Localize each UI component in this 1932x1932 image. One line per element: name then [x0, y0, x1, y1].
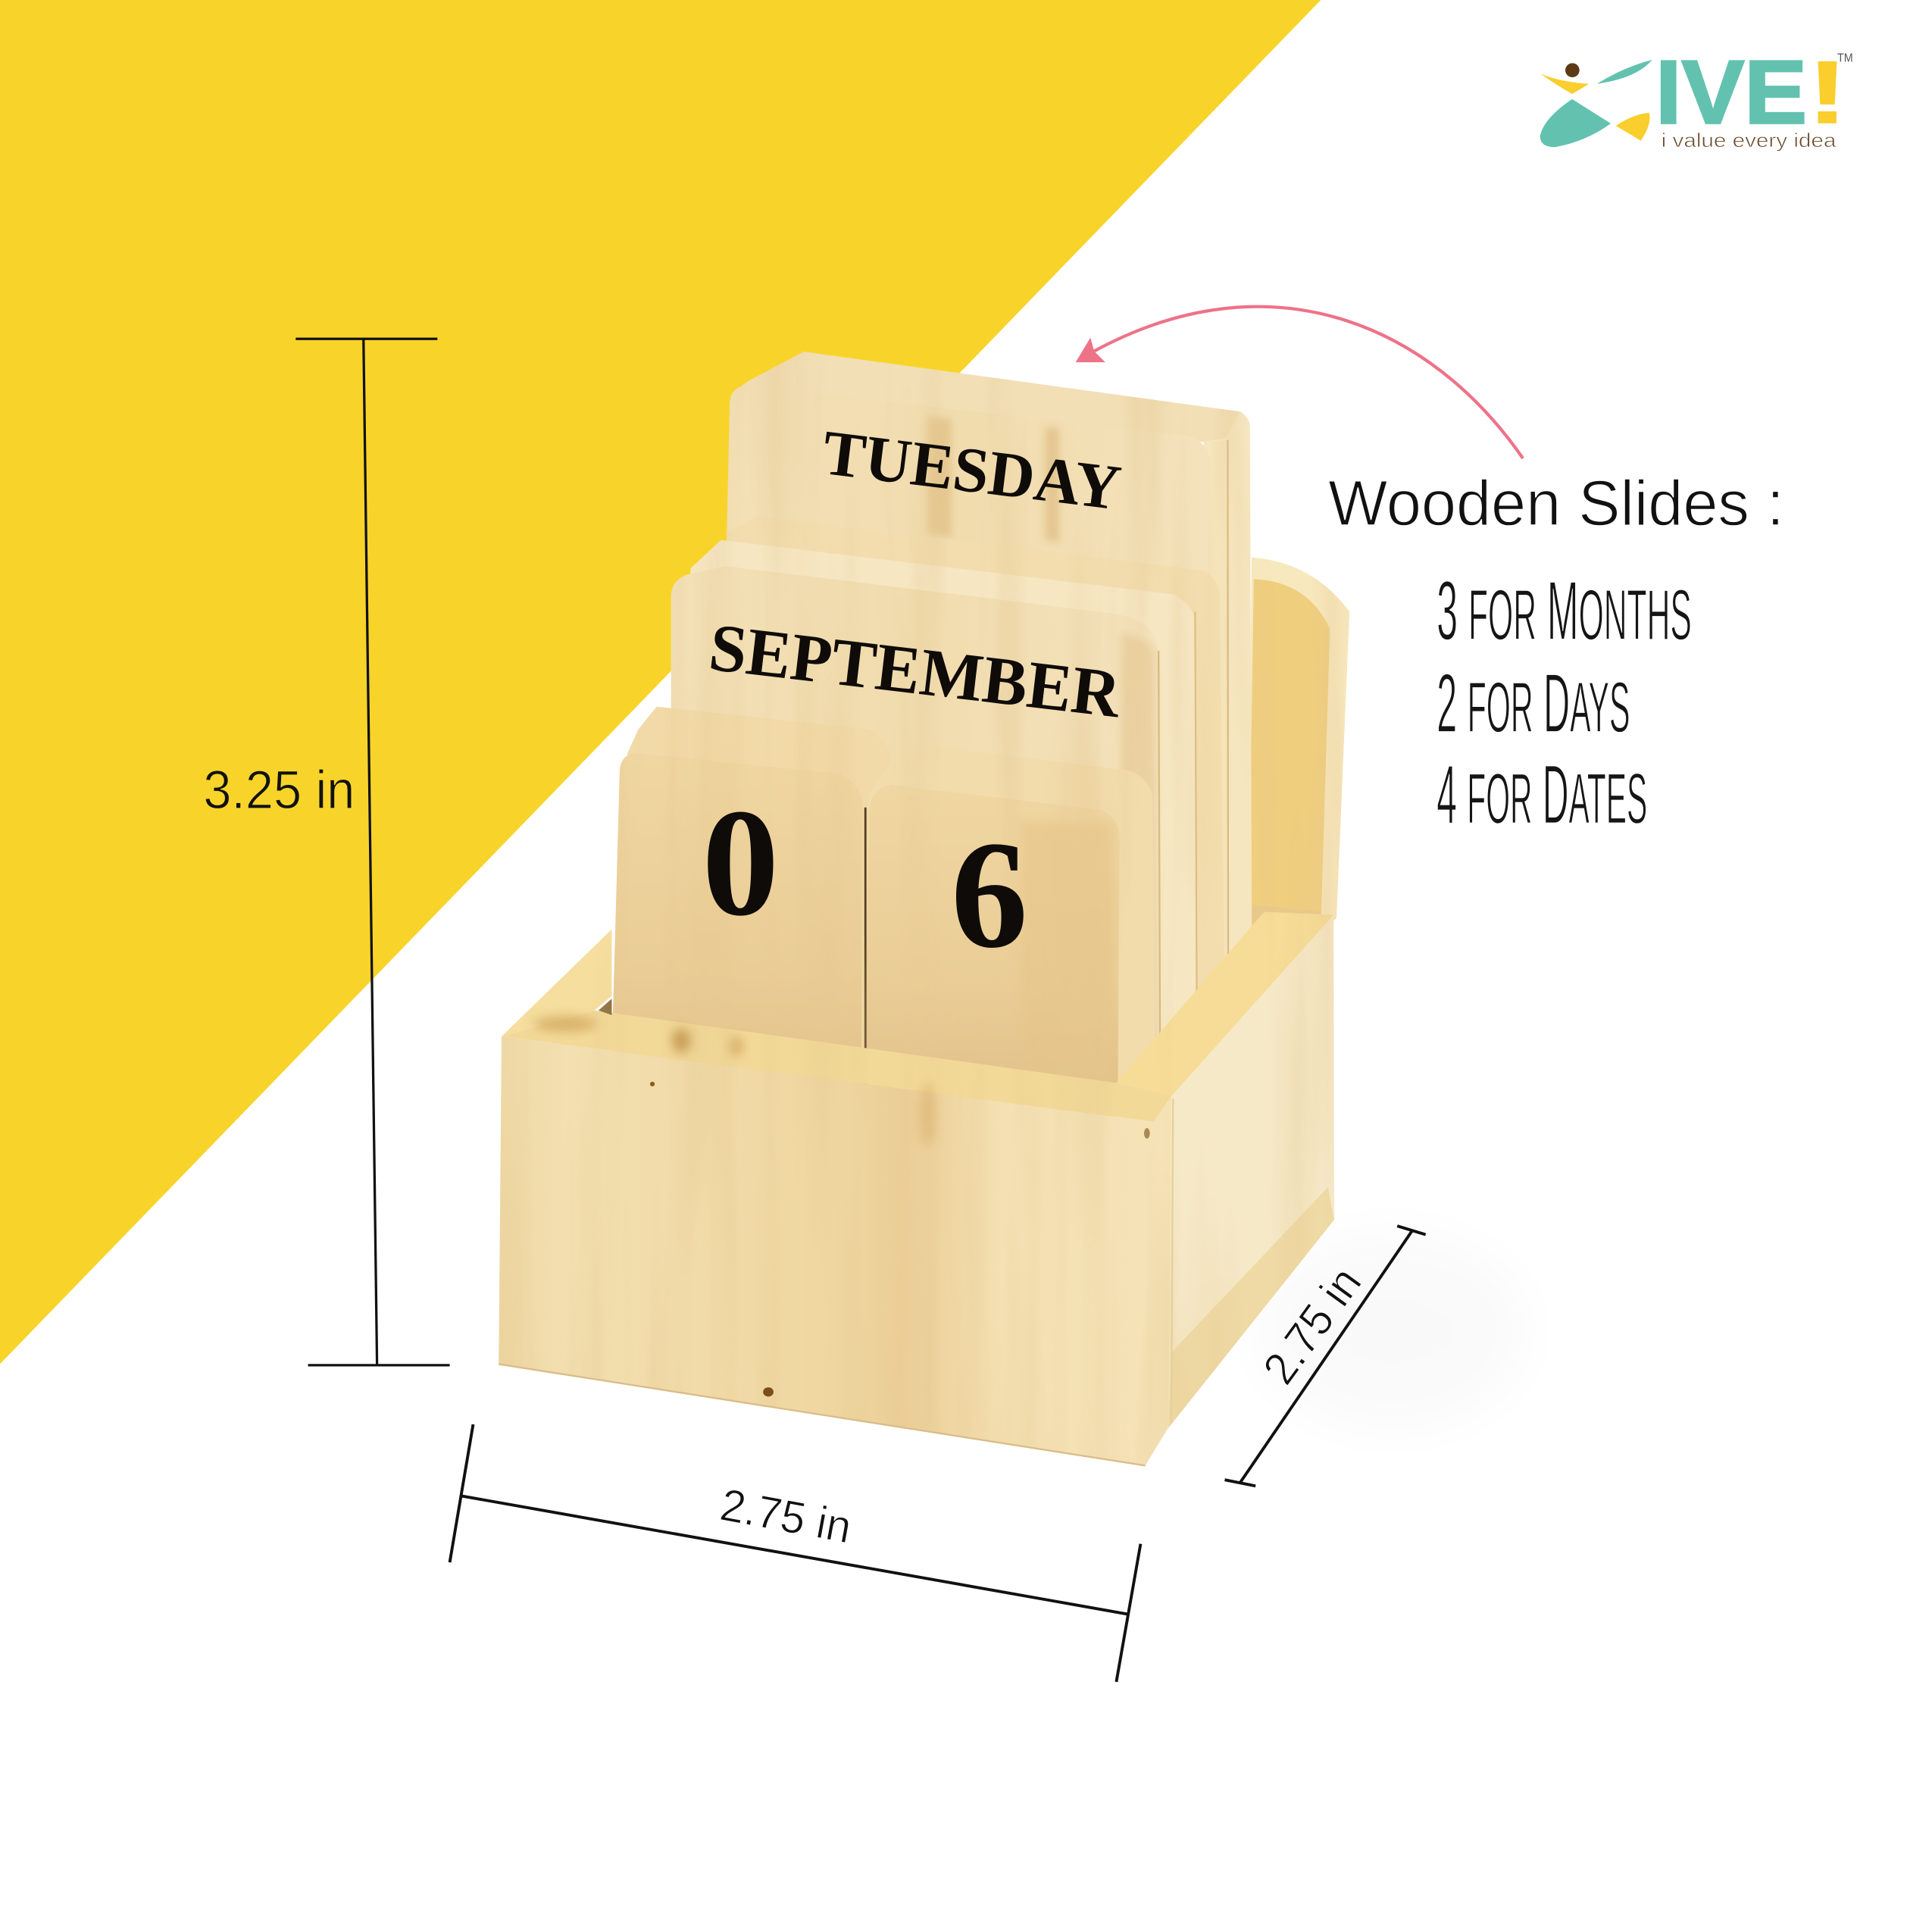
wooden calendar product: [499, 352, 1349, 1465]
logo: [1540, 42, 1853, 152]
depth dimension line: [1225, 1226, 1426, 1486]
logo exclamation: !: [1805, 42, 1849, 142]
height dimension line: [295, 339, 450, 1365]
slide: SEPTEMBER month block: [671, 566, 1160, 1116]
width dimension line: [450, 1424, 1140, 1682]
logo tagline: i value every idea: [1662, 129, 1837, 152]
depth label: 2.75 in: [1253, 1258, 1371, 1393]
print: TUESDAY: TUESDAY: [819, 417, 1124, 524]
callout list: [1436, 564, 1692, 841]
arrow pointing to wooden slides: [1076, 307, 1523, 458]
callout heading: Wooden Slides :: [1328, 467, 1784, 539]
wood knots and edges: [499, 1016, 1173, 1465]
width label: 2.75 in: [717, 1479, 855, 1553]
callout list: 3 FOR MONTHS: [1436, 564, 1692, 658]
slide: date block 6: [864, 745, 1156, 1116]
logo trademark: TM: [1837, 52, 1853, 65]
callout list: 4 FOR DATES: [1436, 748, 1647, 841]
yellow diagonal background: [0, 0, 1321, 1364]
height label: 3.25 in: [203, 760, 355, 821]
print: SEPTEMBER: SEPTEMBER: [705, 610, 1125, 733]
holder: rim: [502, 912, 1333, 1122]
back panel of holder: [1160, 558, 1349, 1116]
holder: front face: [499, 1036, 1171, 1465]
holder: right side face: [1146, 913, 1334, 1465]
slide: TUESDAY day block: [725, 352, 1252, 1116]
print: digit 6: 6: [951, 809, 1028, 980]
logo wordmark: IVE: [1655, 42, 1807, 143]
slide: middle month layers: [690, 516, 1227, 1116]
logo mark: [1540, 60, 1652, 147]
soft floor shadow: [1257, 1232, 1528, 1429]
print: digit 0: 0: [702, 777, 779, 948]
slide: date block 0: [610, 707, 891, 1116]
callout list: 2 FOR DAYS: [1436, 657, 1630, 750]
lower part: holder box: [499, 912, 1334, 1465]
upper part: back panel and slides: [610, 352, 1349, 1116]
